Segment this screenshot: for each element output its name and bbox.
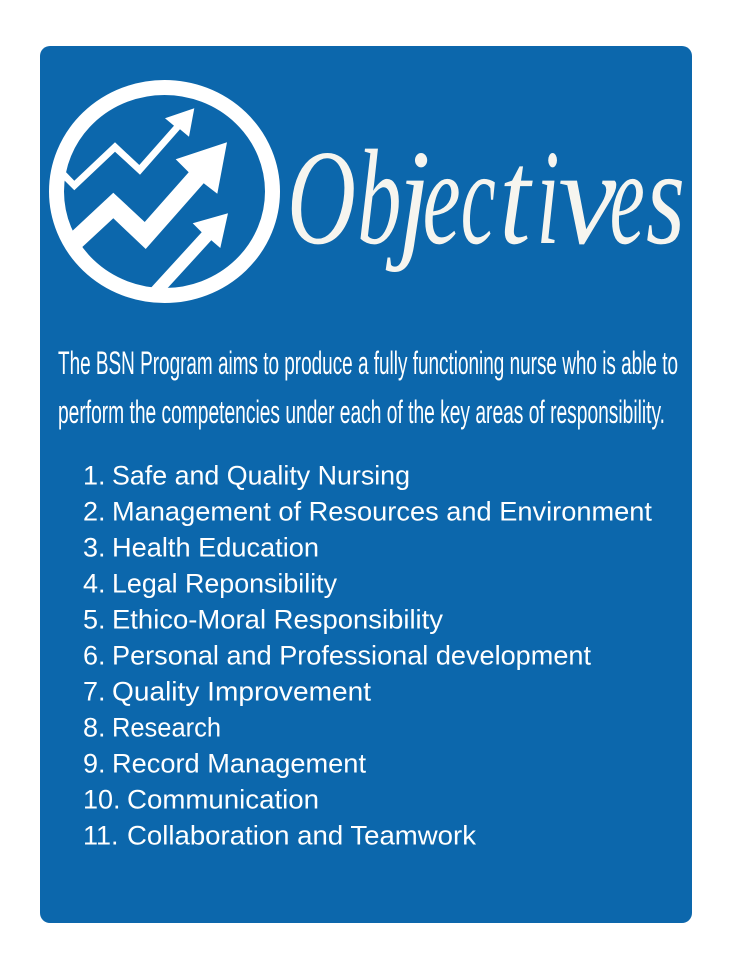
title: v	[558, 123, 617, 273]
list: key areas of responsibility: 5.	[83, 604, 106, 634]
title: i	[536, 123, 560, 273]
title: c	[461, 123, 496, 273]
list: key areas of responsibility: Safe and Quality Nursing	[112, 460, 410, 490]
list: key areas of responsibility: Record Management	[112, 748, 366, 778]
list: key areas of responsibility: Quality Improvement	[112, 676, 372, 706]
list: key areas of responsibility: 9.	[83, 748, 106, 778]
list: key areas of responsibility: Ethico-Moral Responsibility	[112, 604, 444, 634]
list: key areas of responsibility: Management of Resources and Environment	[112, 496, 652, 526]
list: key areas of responsibility: Research	[112, 712, 221, 742]
list: key areas of responsibility: Legal Reponsibility	[112, 568, 337, 598]
list: key areas of responsibility: Personal and Professional development	[112, 640, 591, 670]
title: O	[287, 123, 356, 273]
list: key areas of responsibility: 6.	[83, 640, 106, 670]
list: key areas of responsibility: Collaboration and Teamwork	[127, 820, 476, 850]
title: e	[423, 123, 461, 273]
list: key areas of responsibility: 1.	[83, 460, 106, 490]
list: key areas of responsibility: 2.	[83, 496, 106, 526]
title: b	[357, 123, 402, 273]
list: key areas of responsibility: 7.	[83, 676, 106, 706]
list: key areas of responsibility: 8.	[83, 712, 106, 742]
title: e	[610, 123, 645, 273]
list: key areas of responsibility: 11.	[83, 820, 119, 850]
list: key areas of responsibility	[83, 460, 652, 850]
text block: program aim	[58, 345, 678, 430]
list: key areas of responsibility: 4.	[83, 568, 106, 598]
list: key areas of responsibility: 10.	[83, 784, 121, 814]
title: t	[500, 123, 533, 273]
title: s	[646, 123, 685, 273]
list: key areas of responsibility: 3.	[83, 532, 106, 562]
list: key areas of responsibility: Health Education	[112, 532, 319, 562]
icon: circle with rising arrows	[56, 88, 272, 296]
list: key areas of responsibility: Communication	[127, 784, 319, 814]
title: j	[385, 123, 430, 273]
